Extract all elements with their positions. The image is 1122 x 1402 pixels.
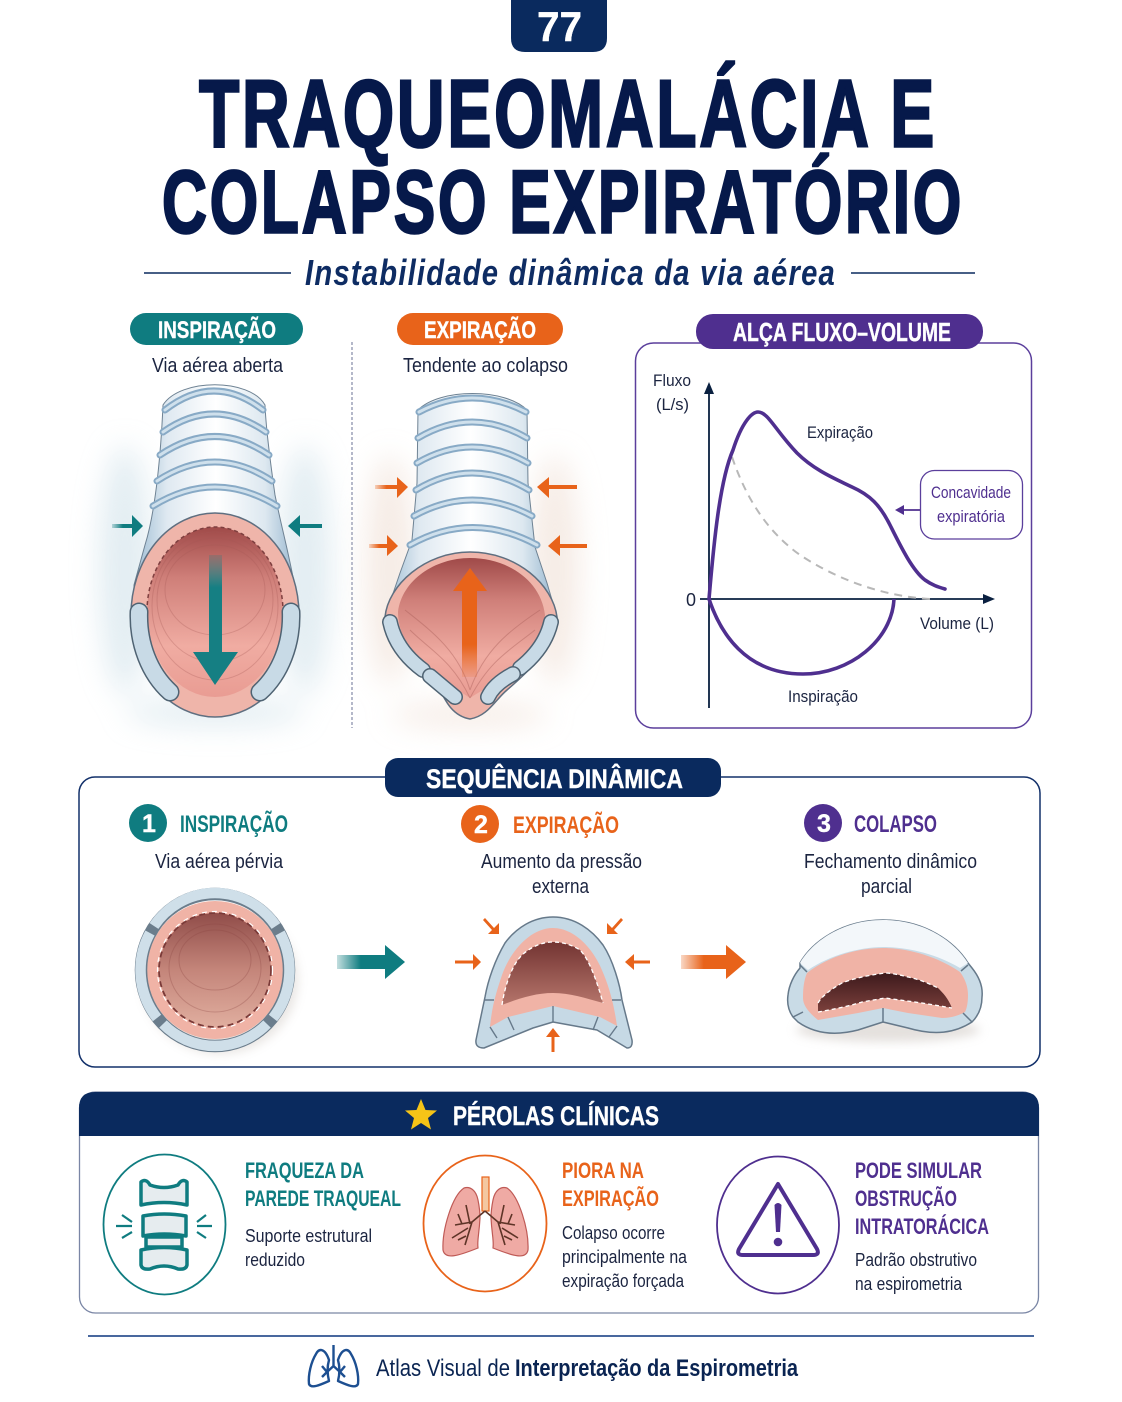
pearl 2: worse on expiration [424,1156,688,1292]
footer: Interpretação da Espirometria [515,1355,799,1382]
pearl 1: weak wall: PAREDE TRAQUEAL [245,1186,401,1211]
step 3 heading: 3 [817,810,831,838]
pearl 1: weak wall [104,1154,401,1294]
footer [309,1345,799,1386]
pearl 1: weak wall: reduzido [245,1250,305,1270]
axis and curve labels: Volume (L) [920,614,994,633]
axis and curve labels: 0 [686,590,696,610]
pearl 1: weak wall: Suporte estrutural [245,1226,372,1246]
pearl 3: may mimic obstruction: Padrão obstrutivo [855,1250,977,1270]
pearl 2: worse on expiration: expiração forçada [562,1271,685,1291]
pearl 3: may mimic obstruction: INTRATORÁCICA [855,1214,989,1239]
panel: clinical pearls [79,1092,1039,1313]
callout: expiratory concavity [895,470,1022,539]
icon: footer lungs [309,1345,358,1386]
expiration label [397,313,568,377]
pearl 3: may mimic obstruction: OBSTRUÇÃO [855,1186,957,1211]
inspiration label: INSPIRAÇÃO [158,316,276,344]
title [162,60,964,252]
sequence heading: SEQUÊNCIA DINÂMICA [426,763,683,794]
step 1 heading: Via aérea pérvia [155,851,284,873]
icon: lungs [424,1156,546,1292]
icon: warning triangle [717,1156,839,1294]
pearl 2: worse on expiration: PIORA NA [562,1158,644,1183]
icon: tracheal segments [104,1154,226,1294]
panel heading [696,314,983,349]
normal loop, dashed [732,457,930,599]
axis and curve labels: Inspiração [788,687,858,706]
panel heading: ALÇA FLUXO–VOLUME [733,317,951,347]
subtitle: Instabilidade dinâmica da via aérea [305,252,836,293]
pearl 1: weak wall: FRAQUEZA DA [245,1158,364,1183]
panel: flow-volume loop [636,314,1032,728]
callout: expiratory concavity: Concavidade [931,483,1011,502]
pearl 2: worse on expiration: principalmente na [562,1247,688,1267]
step 2 heading: Aumento da pressão [481,851,642,873]
callout: expiratory concavity: expiratória [937,507,1005,526]
illustration: open airway ring [141,893,298,1054]
icon: star [405,1099,437,1130]
axis and curve labels [653,371,994,706]
step 3 heading: COLAPSO [854,811,937,838]
pearl 3: may mimic obstruction: na espirometria [855,1274,963,1294]
pearls header [79,1092,1039,1136]
axis and curve labels: Fluxo [653,371,691,390]
arrow: step 1 to 2 [337,945,405,979]
pearl 2: worse on expiration: EXPIRAÇÃO [562,1186,659,1211]
step 1 heading: INSPIRAÇÃO [180,810,288,838]
arrow: step 2 to 3 [681,945,746,979]
sequence heading [385,758,721,797]
inspiration label: Via aérea aberta [152,355,284,377]
step 3 heading: Fechamento dinâmico [804,851,977,873]
inspiration curve [709,599,894,674]
illustration: ring under external pressure [455,917,650,1052]
axis and curve labels: (L/s) [656,395,689,414]
pearl 3: may mimic obstruction [717,1156,989,1294]
page number badge: 77 [537,3,582,50]
step 1 heading: 1 [142,810,156,838]
step 1 heading [129,804,288,873]
pearl 3: may mimic obstruction: PODE SIMULAR [855,1158,982,1183]
axis and curve labels: Expiração [807,423,873,442]
chart axes [700,382,995,708]
illustration: trachea collapsing on expiration [366,394,587,727]
step 2 heading [461,805,642,898]
step 2 heading: EXPIRAÇÃO [513,811,619,839]
pearls header: PÉROLAS CLÍNICAS [453,1100,659,1131]
inspiration label [130,313,303,377]
illustration: partially closed airway [788,920,982,1042]
expiration label: Tendente ao colapso [403,355,568,377]
step 2 heading: 2 [474,811,488,839]
illustration: open trachea on inspiration [99,385,331,726]
step 3 heading: parcial [861,876,912,898]
step 2 heading: externa [532,876,590,898]
pearl 2: worse on expiration: Colapso ocorre [562,1223,665,1243]
page number badge [511,0,607,52]
expiration curve [709,412,945,599]
footer: Atlas Visual de [376,1355,510,1382]
step 3 heading [804,804,977,898]
panel: dynamic sequence [79,758,1040,1067]
expiration label: EXPIRAÇÃO [424,316,536,344]
